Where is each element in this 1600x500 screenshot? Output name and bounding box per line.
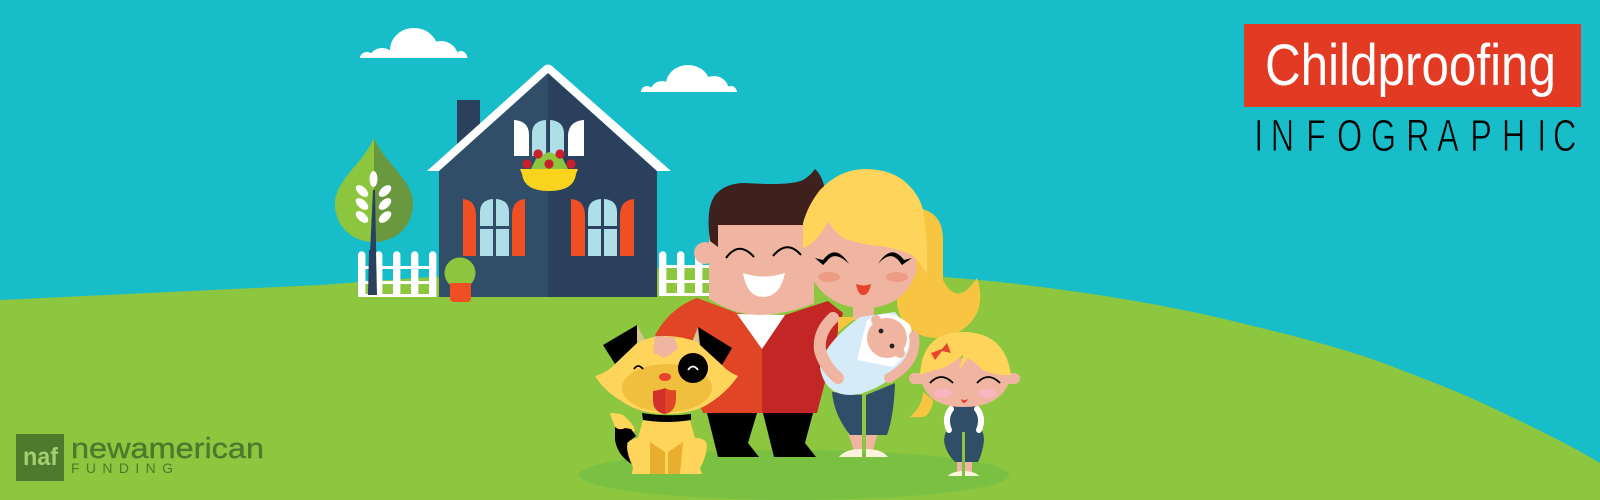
house: [427, 64, 671, 297]
dog head: [595, 336, 738, 414]
chimney: [457, 100, 480, 145]
girl bow: [931, 343, 951, 360]
man hand: [653, 336, 678, 358]
man legs: [707, 413, 816, 457]
ground shadow: [579, 450, 1009, 500]
title banner: Childproofing: [1265, 33, 1556, 98]
green hill: [0, 268, 1600, 500]
fence left: [358, 251, 436, 297]
logo: [16, 433, 264, 481]
ponytail: [897, 208, 980, 338]
lower left window: [463, 199, 525, 256]
woman face: [803, 215, 917, 308]
tree: [335, 138, 413, 295]
dog: [595, 325, 738, 474]
dog collar: [642, 413, 691, 422]
dog ear tips: [634, 325, 703, 345]
logo: newamerican: [71, 433, 264, 465]
girl ears: [909, 373, 925, 384]
fence right: [659, 251, 711, 296]
girl head: [920, 358, 1011, 407]
dog tail: [610, 413, 637, 467]
tree trunk over fence: [368, 250, 377, 295]
woman neck: [853, 300, 874, 320]
dog body: [627, 420, 707, 474]
woman: [803, 169, 980, 457]
subtitle: INFOGRAPHIC: [1254, 112, 1576, 161]
upper window: [514, 120, 584, 156]
cloud right: [641, 65, 737, 92]
man head: [694, 242, 716, 264]
girl ponytail: [910, 392, 933, 417]
lower right window: [571, 199, 634, 256]
yellow top: [838, 317, 857, 332]
man jacket: [655, 298, 843, 413]
woman arms: [820, 318, 838, 378]
woman hair: [803, 169, 927, 273]
logo: FUNDING: [71, 460, 173, 476]
girl: [909, 332, 1020, 476]
woman eyes: [815, 252, 912, 265]
baby: [820, 312, 917, 395]
man: [655, 169, 843, 457]
logo: naf: [23, 443, 59, 471]
woman legs and shoes: [832, 383, 895, 457]
cloud left: [360, 28, 468, 58]
girl legs and shoes: [944, 406, 984, 476]
potted bush: [444, 258, 476, 302]
flower box: [520, 149, 578, 191]
roof: [427, 64, 671, 171]
